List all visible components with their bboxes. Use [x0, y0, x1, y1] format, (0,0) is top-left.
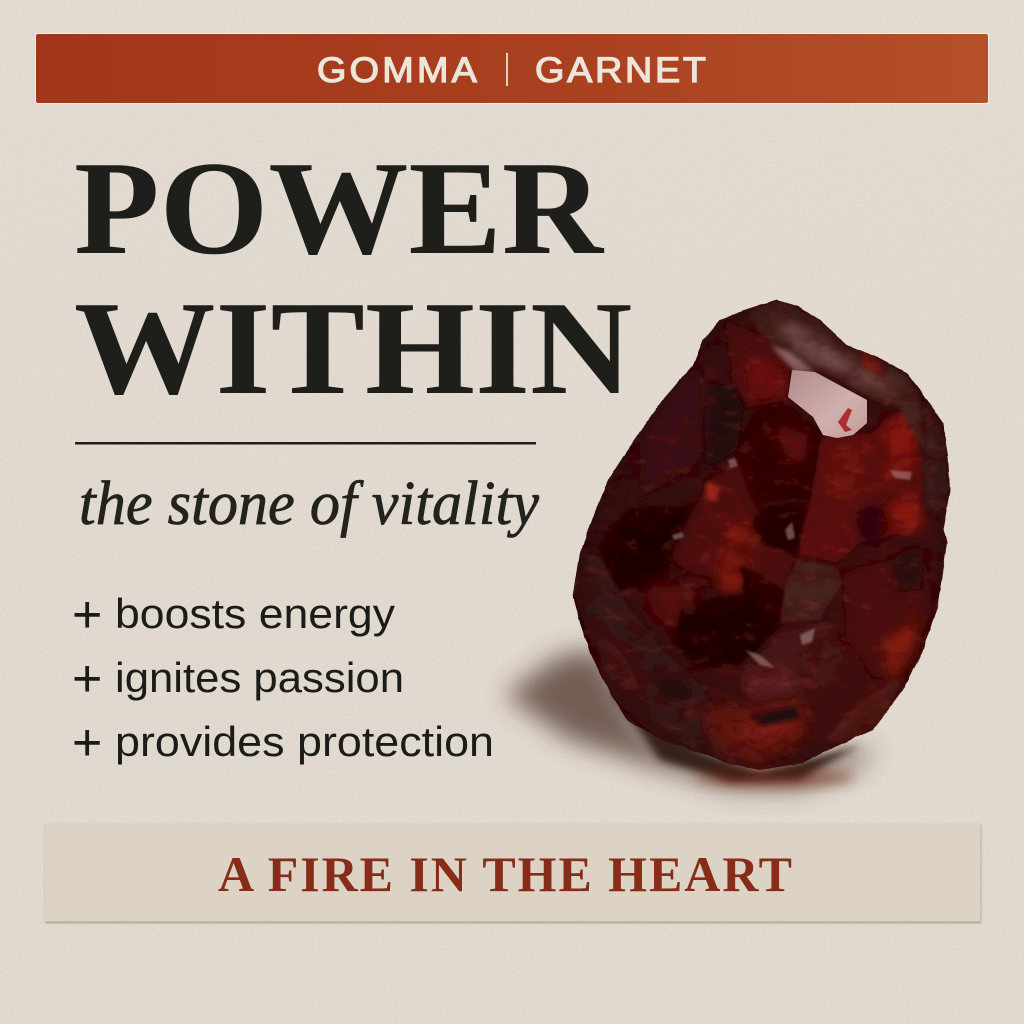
- bottom banner: [44, 822, 981, 923]
- rule under title: [75, 442, 536, 444]
- glints: [672, 458, 912, 668]
- stone shadow: [505, 650, 875, 788]
- benefits list: [72, 586, 494, 772]
- header band: [35, 33, 989, 104]
- grey streak above highlight: [770, 345, 815, 372]
- title: POWER: [74, 134, 605, 282]
- header label: GOMMA: [317, 50, 480, 90]
- benefit: protection: [72, 714, 494, 772]
- subtitle: the stone of vitality: [79, 470, 539, 538]
- header label second: GARNET: [535, 50, 709, 90]
- benefit: energy: [72, 586, 395, 644]
- benefit: protection: provides protection: [115, 718, 494, 765]
- header divider: [506, 53, 508, 86]
- benefit: protection: +: [72, 714, 102, 772]
- highlight vein: [838, 408, 852, 432]
- specular highlight: [788, 370, 867, 438]
- title: [74, 134, 632, 422]
- benefit: energy: boosts energy: [115, 590, 395, 637]
- icon: garnet stone: [560, 290, 960, 780]
- banner text: A FIRE IN THE HEART: [218, 846, 792, 902]
- benefit: passion: ignites passion: [115, 654, 404, 701]
- title: WITHIN: [74, 273, 632, 422]
- benefit: passion: [72, 650, 404, 708]
- benefit: energy: +: [72, 586, 102, 644]
- benefit: passion: +: [72, 650, 102, 708]
